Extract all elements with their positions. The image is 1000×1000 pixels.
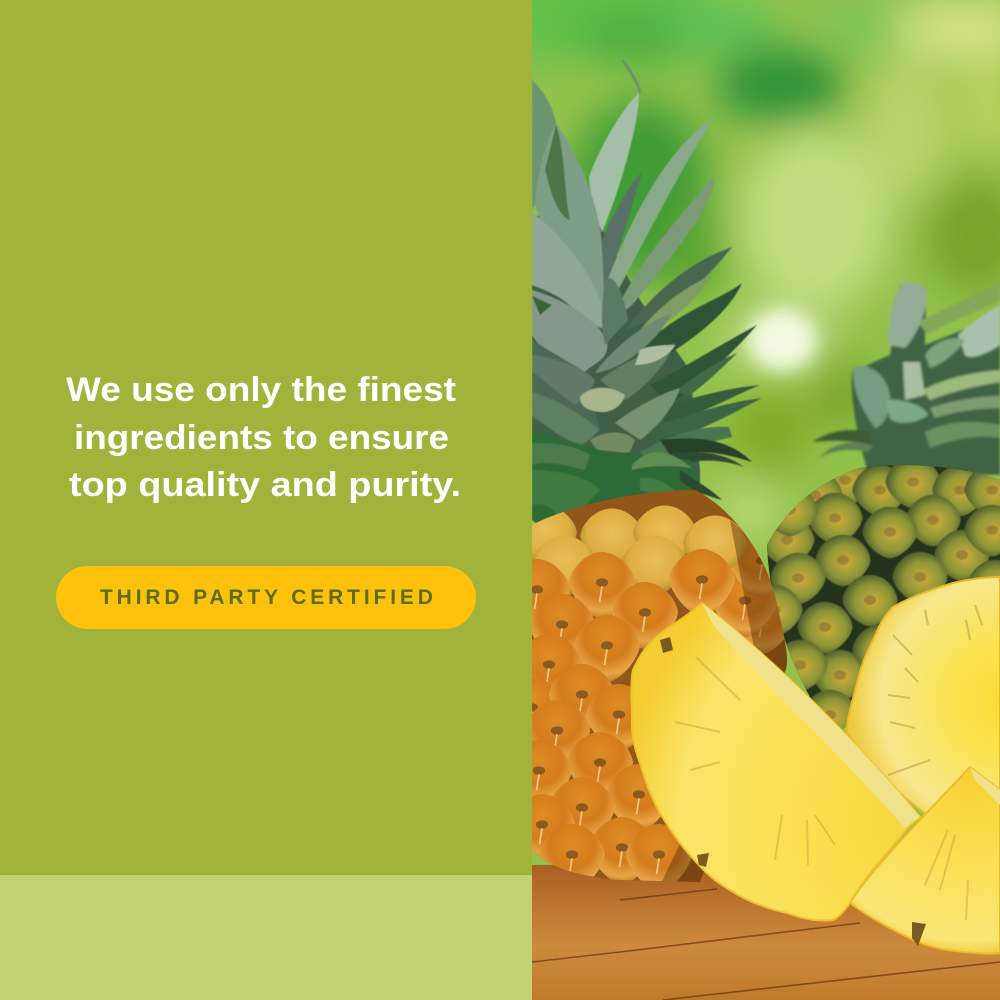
table — [532, 865, 1000, 1000]
blurred foliage background — [510, 0, 1000, 880]
circular pineapple slice — [846, 576, 1000, 814]
large pineapple wedge — [631, 603, 920, 921]
back pineapple body — [767, 465, 1000, 730]
headline text: ingredients to ensure — [74, 419, 449, 457]
front pineapple wedge — [850, 767, 1000, 954]
badge: third party certified pill: THIRD PARTY CERTIFIED — [100, 586, 437, 609]
panel: green text panel — [0, 0, 532, 875]
main pineapple body — [532, 490, 787, 882]
panel: light green footer band — [0, 875, 532, 1000]
photo: pineapples on a wooden table — [499, 0, 1000, 1000]
headline text: top quality and purity. — [69, 466, 461, 504]
headline text: We use only the finest — [66, 371, 456, 409]
back pineapple crown — [812, 282, 1000, 475]
headline text — [66, 371, 461, 504]
main pineapple crown: leaves — [532, 60, 762, 545]
badge: third party certified pill — [56, 566, 476, 629]
